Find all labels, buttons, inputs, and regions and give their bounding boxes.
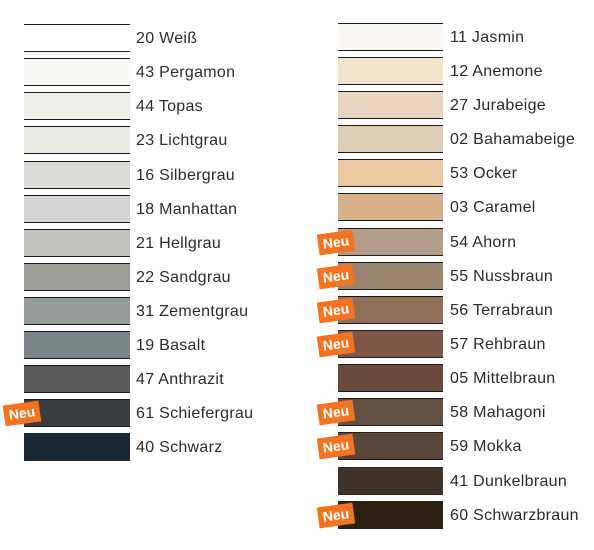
swatch row: 55 Nussbraun: Neu — [322, 266, 350, 286]
swatch row: 40 Schwarz — [24, 433, 222, 461]
swatch row: 19 Basalt: 19 Basalt — [136, 337, 205, 354]
swatch row: 59 Mokka — [316, 432, 522, 460]
swatch row: 43 Pergamon: 43 Pergamon — [136, 64, 235, 81]
swatch row: 20 Weiß — [24, 24, 197, 52]
swatch row: 05 Mittelbraun — [338, 364, 555, 392]
swatch row: 60 Schwarzbraun: Neu — [322, 505, 350, 525]
swatch row: 41 Dunkelbraun — [338, 467, 567, 495]
swatch row: 12 Anemone: 12 Anemone — [450, 63, 543, 80]
swatch row: 16 Silbergrau: 16 Silbergrau — [136, 167, 235, 184]
swatch row: 58 Mahagoni: Neu — [322, 402, 350, 422]
swatch row: 54 Ahorn: 54 Ahorn — [450, 234, 516, 251]
swatch row: 41 Dunkelbraun: 41 Dunkelbraun — [450, 473, 567, 490]
swatch row: 56 Terrabraun: 56 Terrabraun — [450, 302, 553, 319]
swatch row: 60 Schwarzbraun: 60 Schwarzbraun — [450, 507, 579, 524]
swatch row: 44 Topas: 44 Topas — [136, 98, 203, 115]
swatch row: 56 Terrabraun: Neu — [322, 300, 350, 320]
swatch row: 18 Manhattan: 18 Manhattan — [136, 201, 237, 218]
swatch row: 03 Caramel — [338, 193, 536, 221]
swatch row: 57 Rehbraun: Neu — [322, 334, 350, 354]
swatch row: 03 Caramel: 03 Caramel — [450, 199, 536, 216]
swatch row: 47 Anthrazit — [24, 365, 224, 393]
swatch row: 11 Jasmin: 11 Jasmin — [450, 29, 524, 46]
swatch row: 27 Jurabeige — [338, 91, 546, 119]
swatch row: 61 Schiefergrau: Neu — [8, 403, 36, 423]
swatch row: 02 Bahamabeige: 02 Bahamabeige — [450, 131, 575, 148]
swatch row: 11 Jasmin — [338, 23, 524, 51]
swatch row: 22 Sandgrau — [24, 263, 231, 291]
swatch row: 05 Mittelbraun: 05 Mittelbraun — [450, 370, 555, 387]
swatch row: 02 Bahamabeige — [338, 125, 575, 153]
swatch row: 61 Schiefergrau: 61 Schiefergrau — [136, 405, 253, 422]
swatch row: 23 Lichtgrau: 23 Lichtgrau — [136, 132, 228, 149]
swatch row: 22 Sandgrau: 22 Sandgrau — [136, 269, 231, 286]
swatch row: 47 Anthrazit: 47 Anthrazit — [136, 371, 224, 388]
swatch row: 59 Mokka: Neu — [322, 436, 350, 456]
swatch row: 61 Schiefergrau — [2, 399, 253, 427]
swatch row: 18 Manhattan — [24, 195, 237, 223]
swatch row: 54 Ahorn — [316, 228, 516, 256]
swatch row: 58 Mahagoni — [316, 398, 546, 426]
swatch row: 21 Hellgrau: 21 Hellgrau — [136, 235, 221, 252]
swatch row: 23 Lichtgrau — [24, 126, 228, 154]
swatch row: 57 Rehbraun: 57 Rehbraun — [450, 336, 546, 353]
swatch row: 16 Silbergrau — [24, 161, 235, 189]
swatch row: 31 Zementgrau — [24, 297, 248, 325]
swatch row: 55 Nussbraun: 55 Nussbraun — [450, 268, 553, 285]
swatch row: 21 Hellgrau — [24, 229, 221, 257]
swatch row: 53 Ocker: 53 Ocker — [450, 165, 517, 182]
swatch row: 53 Ocker — [338, 159, 517, 187]
swatch row: 56 Terrabraun — [316, 296, 553, 324]
swatch row: 59 Mokka: 59 Mokka — [450, 438, 522, 455]
swatch row: 54 Ahorn: Neu — [322, 232, 350, 252]
swatch row: 12 Anemone — [338, 57, 543, 85]
swatch row: 60 Schwarzbraun — [316, 501, 579, 529]
swatch row: 40 Schwarz: 40 Schwarz — [136, 439, 222, 456]
swatch row: 58 Mahagoni: 58 Mahagoni — [450, 404, 546, 421]
swatch row: 20 Weiß: 20 Weiß — [136, 30, 197, 47]
swatch row: 44 Topas — [24, 92, 203, 120]
swatch row: 55 Nussbraun — [316, 262, 553, 290]
swatch row: 31 Zementgrau: 31 Zementgrau — [136, 303, 248, 320]
swatch row: 19 Basalt — [24, 331, 205, 359]
swatch row: 43 Pergamon — [24, 58, 235, 86]
swatch row: 57 Rehbraun — [316, 330, 546, 358]
swatch row: 27 Jurabeige: 27 Jurabeige — [450, 97, 546, 114]
